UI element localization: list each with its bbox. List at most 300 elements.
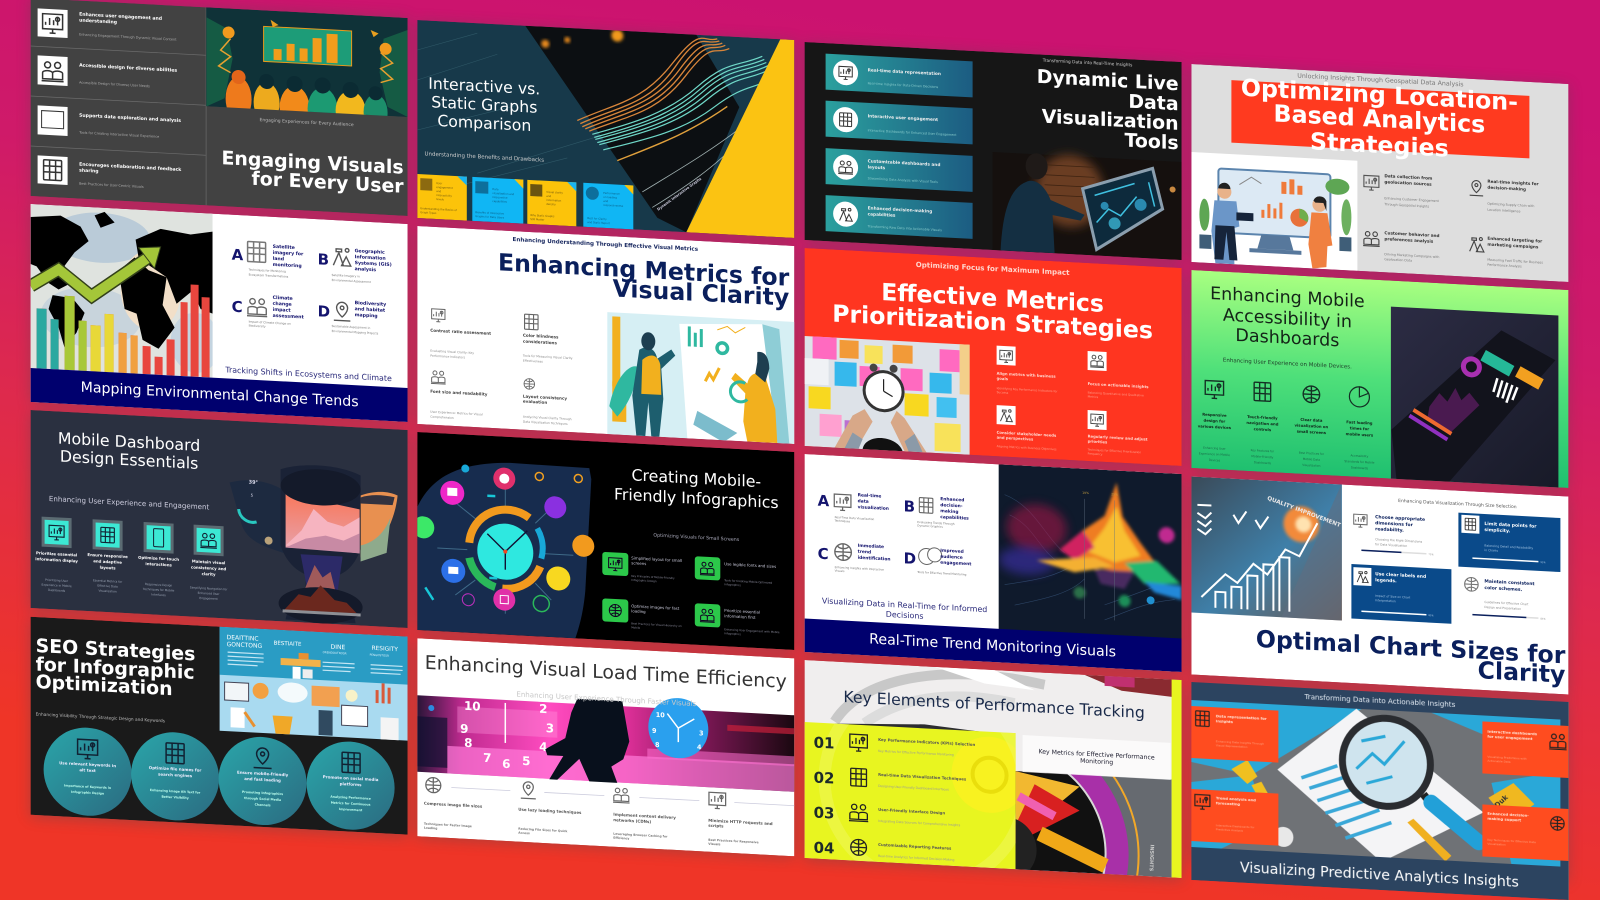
item: stakeholder needs: Aligning Metrics with Business Objectives: [997, 444, 1057, 451]
item B: analysis: [355, 266, 376, 273]
yellow overlay panel: [805, 722, 1016, 869]
title: Design Essentials: [60, 447, 198, 473]
bottom title band: Mapping Environmental Change Trends: [81, 380, 359, 410]
cards: interpretive: [492, 195, 508, 200]
item: user engagement: Enhances user engagement and: [79, 12, 162, 22]
title: [1210, 284, 1365, 353]
panel: Dynamic Live Data Visualization Tools: [805, 42, 1182, 260]
circle: mobile friendly: and fast loading: [244, 776, 281, 783]
item B: B: [904, 497, 915, 516]
image: target with tracks: INSIGHTS: [1148, 844, 1155, 872]
feature card 3: Customizable dashboards and: [868, 158, 940, 168]
item: customer behavior: preferences analysis: [1384, 236, 1434, 244]
callout: interactive dashboards: [1482, 721, 1568, 778]
card: labels and legends: 85%: [1428, 614, 1434, 617]
title: [36, 635, 195, 701]
card: consistent color schemes: Design and Presentation: [1484, 605, 1521, 611]
panel: Optimal Chart Sizes for Clarity: [1191, 476, 1568, 694]
item D: audience: [940, 554, 963, 561]
list item 02: [814, 766, 967, 795]
title: Interactive vs.: [428, 74, 540, 99]
trophy-shaped dashboard image: 39°: [249, 480, 259, 486]
item: responsive design: Experience on Mobile: [1199, 451, 1230, 457]
step: content delivery: Leveraging Browser Caching for: [613, 832, 668, 839]
step 3: interactions: [145, 561, 172, 568]
title: Creating Mobile-: [631, 465, 761, 491]
card: labels and legends: Impact of Size on Chart: [1375, 594, 1411, 600]
callout: trend analysis: forecasting: [1216, 800, 1240, 807]
subtitle: Enhancing User Experience on Mobile Devices.: [1223, 358, 1352, 371]
step 1: Experience in Mobile: [42, 583, 72, 588]
callout: decision support: Visualization: [1487, 842, 1506, 847]
item: simplified layout: screens: [631, 560, 646, 566]
bottom title band: Real-Time Trend Monitoring Visuals: [869, 631, 1116, 661]
feature card 4: Transforming Raw Data into Actionable Visuals: [867, 224, 942, 232]
trophy-shaped dashboard image: [230, 461, 398, 627]
item B: [904, 494, 969, 530]
cards: Best for Clarity: [587, 216, 607, 221]
item: touch friendly: Mobile-Friendly: [1251, 454, 1274, 459]
circle: file names: Better Visibility: [161, 795, 189, 800]
box: key metrics: Monitoring: [1080, 758, 1113, 766]
item: accessible design: [38, 55, 177, 88]
step: lazy loading: [518, 781, 604, 839]
cards: on loading: [603, 195, 617, 200]
cards: responsiveness: [603, 203, 624, 208]
item C: [818, 541, 890, 576]
item: touch friendly: [1246, 382, 1279, 466]
title: [58, 428, 200, 473]
cards: Why Static Graphs: [530, 213, 555, 218]
item: font size: Comprehension: [430, 415, 454, 420]
card: appropriate dimensions: dimensions for: [1375, 520, 1414, 528]
item: review and adjust: priorities: [1088, 439, 1108, 445]
title: Enhancing Mobile: [1210, 284, 1365, 312]
item A: A: [232, 246, 244, 264]
step: HTTP requests: Visuals: [708, 842, 721, 846]
card: consistent color schemes: [1465, 577, 1546, 621]
bottom title band: [31, 368, 408, 422]
panel: SEO Strategies for Infographic Optimization: [31, 617, 408, 835]
item: align metrics: [997, 346, 1058, 397]
item: actionable insights: Balancing Quantitative and Qualitative: [1088, 391, 1144, 397]
item: review and adjust: Regularly review and adjust: [1088, 434, 1148, 442]
title: Enhancing Visual Load Time Efficiency: [425, 652, 787, 693]
item: fast loading: Accessibility: [1351, 453, 1369, 458]
yellow glow rings: [825, 679, 1028, 890]
item: actionable insights: Focus on actionable insights: [1088, 381, 1149, 389]
card: limit data points: Balancing Detail and Readability: [1484, 544, 1533, 550]
step: lazy loading: Use lazy loading techniques: [518, 807, 582, 815]
item: stakeholder needs: Consider stakeholder needs: [997, 430, 1057, 438]
item: review and adjust: Frequency: [1088, 452, 1103, 456]
panel: Mapping Environmental Change Trends: [31, 204, 408, 422]
image: rainbow data landscape: [999, 464, 1182, 639]
item: layout consistency: Layout consistency: [523, 394, 567, 401]
step 3: Techniques for Mobile: [142, 587, 174, 593]
card: limit data points: Limit data points for: [1484, 521, 1537, 530]
photo: person walking past neon clocks: 3: [699, 729, 704, 737]
feature card 1: Real-time Insights for Data-Driven Decisions: [868, 81, 939, 89]
illustration: two people at monitor: [1191, 152, 1357, 271]
item: layout consistency: Analyzing Visual Clarity Through: [523, 415, 572, 421]
subtitle: Enhancing Understanding Through Effective Visual Metrics: [513, 237, 699, 253]
cards: Still Matter: [530, 217, 545, 222]
panel: Enhancing Mobile Accessibility in Dashboards: [1191, 270, 1568, 488]
item: touch friendly: Key Features for: [1251, 448, 1275, 453]
title: Key Elements of Performance Tracking: [843, 687, 1145, 722]
item: essential information first: Infographics: [724, 631, 741, 636]
item: contrast ratio: Evaluating Visual Clarity: Key: [430, 349, 474, 355]
cards: User: [436, 181, 443, 185]
callout: interactive dashboards: Visualizing Predictions with: [1487, 755, 1527, 761]
item A: imagery for: [273, 250, 304, 257]
subtitle: Enhancing Data Visualization Through Size Selection: [1398, 498, 1517, 510]
item B: decision-: [940, 502, 963, 509]
title: Optimization: [36, 671, 173, 700]
circle: mobile friendly: [219, 735, 307, 827]
subtitle: Optimizing Focus for Maximum Impact: [916, 260, 1070, 277]
title: [1256, 625, 1566, 689]
clock and app icons illustration: [412, 458, 594, 639]
image: flat SEO infographic: PENGOSTOSR: [370, 653, 389, 658]
item: font size: Font size and readability: [430, 389, 488, 397]
card: labels and legends: Use clear labels and: [1375, 571, 1426, 580]
list item 04: [814, 837, 954, 864]
item A: Real-time: [858, 492, 881, 500]
item: collaboration: [38, 155, 182, 191]
title: [832, 275, 1153, 344]
item: marketing campaigns: Measuring Foot Traffic for Business: [1487, 258, 1543, 265]
title: Optimizing Location-: [1241, 74, 1518, 116]
item: real-time insights: decision-making: [1487, 185, 1526, 192]
item A: [232, 241, 304, 279]
step: lazy loading: Access: [518, 831, 530, 835]
step: compress images: [424, 777, 510, 834]
item: contrast ratio: Contrast ratio assessment: [430, 328, 491, 336]
item: customer behavior: Geolocation Data: [1384, 257, 1412, 263]
item: data exploration: Supports data exploration and analysis: [79, 113, 181, 124]
item: clear data visualization: Best Practices for: [1299, 451, 1325, 456]
cards: Data: [492, 187, 499, 191]
item: touch friendly: Touch-friendly: [1247, 414, 1278, 421]
item: essential information first: Prioritize essential: [724, 608, 760, 615]
item D: Tools for Effective Trend Monitoring: [916, 570, 967, 577]
feature card 2: Interactive user engagement: [868, 113, 938, 123]
item: collaboration: Best Practices for User-Centric Visuals: [79, 182, 144, 189]
item: clear data visualization: [1295, 385, 1329, 468]
step 2: Effective Data: [97, 584, 118, 589]
card: consistent color schemes: color schemes.: [1484, 585, 1523, 593]
item: accessible design: Accessible Design for Diverse User Needs: [79, 81, 150, 88]
item A: Real-Time Data Visualization: [835, 515, 875, 521]
item: touch friendly: controls: [1254, 426, 1272, 432]
panel: Engaging Visuals for Every User: [31, 0, 408, 216]
item C: Climate: [273, 295, 293, 302]
callout: data representation: insights: [1216, 718, 1234, 724]
title: [223, 150, 404, 194]
image: flat SEO infographic: BESTIAITE: [274, 641, 302, 648]
photo: person walking past neon clocks: 8: [464, 736, 472, 750]
title: Friendly Infographics: [614, 484, 779, 512]
item: actionable insights: [1088, 351, 1149, 402]
item: legible fonts: [695, 556, 776, 589]
list item 04: Real-time Analytics for Informed Decision-Making: [878, 854, 954, 862]
item: user engagement: [38, 8, 177, 44]
item: fast loading: mobile users: [1346, 431, 1374, 438]
item: color blindness: Effectiveness: [523, 359, 543, 364]
circle: social media: Improvement: [339, 807, 363, 812]
list item 02: Designing User-Friendly Dashboard Interfaces: [878, 784, 949, 792]
subtitle: Understanding the Benefits and Drawbacks: [424, 151, 544, 164]
item A: Ecosystem Transformations: [249, 273, 289, 279]
item: real-time insights: Optimizing Supply Chain with: [1487, 202, 1534, 208]
item: font size: User Experience: Metrics for Visual: [430, 410, 483, 416]
item: marketing campaigns: Enhanced targeting for: [1487, 236, 1543, 244]
item: responsive design: design for: [1204, 418, 1225, 424]
step: lazy loading: Reducing File Sizes for Quick: [518, 827, 568, 833]
red title bar: [1231, 80, 1529, 158]
feature card 2: [826, 101, 973, 144]
item: responsive design: Responsive: [1202, 412, 1227, 418]
list item 01: Key Performance Indicators (KPIs) Selection: [878, 737, 975, 747]
list item 04: Customizable Reporting Features: [878, 842, 952, 851]
item: essential information first: Enhancing User Engagement with Mobile: [724, 627, 780, 634]
item: optimize images: Best Practices for Visual Hierarchy on: [631, 621, 682, 628]
photo: analyst at touch screen: [993, 151, 1182, 260]
item: contrast ratio: Performance Indicators: [430, 354, 465, 360]
feature card 3: [826, 148, 973, 192]
title: Enhancing Metrics for: [498, 248, 790, 292]
title: [1242, 78, 1517, 160]
card: limit data points: [1458, 513, 1560, 572]
item: user engagement: understanding: [79, 18, 117, 26]
step: compress images: Compress image file sizes: [424, 801, 483, 809]
panel: Optimizing Location-Based Analytics Strategies: [1191, 64, 1568, 282]
item: collaboration: sharing: [79, 168, 99, 175]
card: consistent color schemes: 85%: [1540, 617, 1546, 621]
item: data collection: Through Geospatial Insights: [1383, 202, 1429, 209]
list item 02: Real-time Data Visualization Techniques: [878, 772, 967, 782]
item: legible fonts: Infographics: [724, 582, 741, 587]
item: customer behavior: Driving Marketing Campaigns with: [1384, 252, 1439, 259]
title: Engaging Visuals: [221, 147, 404, 179]
title: Accessibility in: [1223, 306, 1352, 333]
item D: Environmental Mapping Projects: [332, 329, 379, 335]
title: Tools: [1125, 129, 1179, 154]
step 2: Ensure responsive: [87, 552, 128, 559]
cards: information: [546, 198, 562, 203]
image: rainbow data landscape: 25%: [1111, 492, 1118, 497]
cards: Performance: [603, 191, 620, 196]
circle: mobile friendly: Promoting Infographics: [242, 790, 283, 796]
step 1: Dashboards: [48, 588, 66, 593]
subtitle: [822, 596, 987, 624]
item C: C: [232, 298, 243, 316]
callout: decision support: [1482, 804, 1568, 861]
circle: relevant keywords: Infographic Design: [71, 790, 104, 796]
box: key metrics: Key Metrics for Effective Performance: [1039, 748, 1155, 762]
item: real-time insights: [1470, 178, 1539, 214]
subtitle: Optimizing Visuals for Small Screens: [653, 533, 740, 543]
item: review and adjust: [1087, 410, 1148, 459]
item: responsive design: Devices: [1209, 458, 1221, 463]
step 2: layouts: [100, 565, 116, 571]
feature card 1: Real-time data representation: [868, 67, 941, 77]
cards: visualization and: [492, 191, 515, 196]
trophy-shaped dashboard image: 5: [251, 493, 254, 498]
step: compress images: Loading: [424, 826, 437, 830]
item: layout consistency: Data Visualization Techniques: [523, 420, 568, 426]
cards: density: [546, 202, 556, 206]
item: clear data visualization: Visualization: [1302, 463, 1321, 468]
yellow corner: [686, 34, 794, 238]
item: layout consistency: [523, 378, 572, 426]
dark wedge with data lines: [525, 25, 775, 237]
list item 03: 03: [814, 803, 834, 823]
feature card 4: capabilities: [868, 211, 896, 219]
item A: monitoring: [273, 262, 302, 269]
photo: magnifier over report on a desk: [1191, 700, 1560, 872]
item: layout consistency: evaluation: [523, 399, 547, 405]
title: [498, 248, 790, 312]
circle: relevant keywords: [44, 725, 132, 818]
feature card 1: [826, 54, 973, 97]
panel: Creating Mobile-Friendly Infographics: [412, 432, 794, 650]
item: simplified layout: Infographic Design: [631, 578, 657, 583]
title: SEO Strategies: [36, 635, 195, 665]
item: clear data visualization: visualization on: [1295, 422, 1329, 429]
callout: data representation: Data representation for: [1216, 713, 1267, 721]
item: touch friendly: navigation and: [1246, 420, 1279, 427]
item: marketing campaigns: Performance Analysis: [1487, 263, 1522, 269]
card: appropriate dimensions: Choose appropriate: [1375, 514, 1425, 523]
item: marketing campaigns: [1470, 235, 1543, 270]
circle: file names: search engines: [158, 771, 193, 778]
item B: Environmental Assessment: [332, 278, 372, 284]
cards: engagement: [436, 185, 453, 190]
photo: person walking past neon clocks: 4: [539, 740, 547, 754]
image: flat SEO infographic: GONCTONG: [227, 641, 263, 650]
item C: Visuals: [835, 569, 845, 573]
item: data exploration: Tools for Creating Interactive Visual Experience: [78, 131, 159, 139]
list item 03: [814, 802, 961, 829]
item: real-time insights: Real-time insights for: [1487, 179, 1539, 186]
item C: trend: [858, 549, 871, 556]
item C: Enhancing Insights with Interactive: [835, 565, 884, 572]
list item 04: 04: [814, 838, 834, 858]
title: Visualization: [1042, 106, 1179, 135]
cards: and Static Report: [587, 220, 610, 225]
step 4: Simplifying Navigation for: [190, 585, 228, 591]
subtitle: Visualizing Data in Real-Time for Informed: [822, 596, 987, 614]
cards: and: [436, 189, 442, 193]
step: compress images: Techniques for Faster Image: [424, 822, 472, 828]
title: Based Analytics: [1274, 99, 1485, 139]
callout: trend analysis: Predictive Analysis: [1216, 827, 1243, 833]
step 4: clarity: [202, 571, 216, 577]
image: quality improvement arrow: QUALITY IMPROVEMENT: [1266, 496, 1341, 529]
item D: Biodiversity: [355, 300, 386, 308]
photo: person walking past neon clocks: 2: [539, 702, 547, 716]
item C: Biodiversity: [249, 324, 266, 328]
step: content delivery: Efficiency: [613, 836, 629, 841]
cards: Graphs for Data Users: [475, 214, 505, 220]
photo: person walking past neon clocks: 4: [697, 743, 702, 751]
item: fast loading: times for: [1350, 425, 1369, 431]
step 4: Maintain visual: [192, 559, 225, 565]
item: review and adjust: Techniques for Effective Prioritization: [1087, 447, 1141, 454]
photo: person walking past neon clocks: 3: [546, 721, 554, 736]
step 3: Optimize for touch: [138, 555, 179, 562]
cards: Graph Types: [420, 210, 437, 215]
card: limit data points: simplicity.: [1484, 527, 1510, 534]
item C: Impact of Climate Change on: [249, 320, 291, 326]
feature card 3: layouts: [868, 164, 886, 171]
dark wedge with data lines: Dynamic Interactive Graphs: [656, 177, 702, 212]
subtitle: Decisions: [886, 610, 923, 621]
item: essential information first: [695, 603, 780, 638]
callout: interactive dashboards: for user engagement: [1487, 734, 1533, 741]
item B: Systems (GIS): [355, 260, 392, 268]
item: touch friendly: Dashboards: [1254, 460, 1271, 465]
card: labels and legends: legends.: [1375, 577, 1397, 584]
step: HTTP requests: Minimize HTTP requests and: [708, 818, 773, 826]
step: HTTP requests: [708, 792, 794, 850]
photo: person walking past neon clocks: 9: [652, 727, 657, 735]
card: appropriate dimensions: for Data Visualization: [1375, 542, 1407, 548]
step 3: [138, 522, 179, 598]
item D: and habitat: [355, 306, 386, 314]
circle: file names: Enhancing Image Alt Text for: [150, 788, 201, 795]
circle: social media: Analyzing Performance: [330, 795, 371, 801]
item: data collection: [1364, 172, 1440, 209]
cards: interactivity: [436, 193, 452, 198]
card: labels and legends: Interpretation: [1375, 598, 1396, 603]
item: color blindness: [522, 314, 573, 365]
card: appropriate dimensions: Choosing the Right Dimensions: [1375, 537, 1423, 544]
item: optimize images: [602, 598, 682, 632]
image: flat SEO infographic: ORENDOUTROSR: [323, 650, 347, 655]
list item 01: 01: [814, 733, 834, 753]
photo: clock and sticky notes: [805, 336, 970, 455]
item: clear data visualization: Clear data: [1300, 417, 1323, 423]
title: Comparison: [437, 111, 531, 135]
item B: [319, 248, 392, 283]
card: labels and legends: [1351, 564, 1451, 624]
item: responsive design: [1198, 380, 1232, 463]
callout: trend analysis: Interactive Dashboards for: [1216, 823, 1255, 829]
step 2: Visualization: [98, 589, 117, 594]
item: essential information first: information first: [724, 613, 756, 620]
cards: [417, 174, 633, 229]
step 1: Prioritizing User: [45, 578, 69, 583]
item D: mapping: [355, 312, 378, 319]
step: content delivery: [613, 788, 699, 844]
circle: social media: Promote on social media: [323, 774, 379, 782]
photo: magnifier over report on a desk: Duk: [1493, 793, 1510, 810]
panel: Visualizing Predictive Analytics Insights: [1191, 682, 1568, 900]
item: simplified layout: Key Principles of Mobile-Friendly: [631, 574, 675, 580]
step 3: Interfaces: [151, 592, 166, 597]
item B: Information: [355, 254, 386, 262]
item: stakeholder needs: [997, 405, 1057, 451]
photo: person walking past neon clocks: [417, 684, 794, 792]
item C: [232, 296, 304, 328]
subtitle: Enhancing User Experience Through Faster Visuals: [516, 690, 697, 708]
step: HTTP requests: Best Practices for Responsive: [708, 838, 759, 844]
item A: Satellite: [273, 244, 295, 251]
